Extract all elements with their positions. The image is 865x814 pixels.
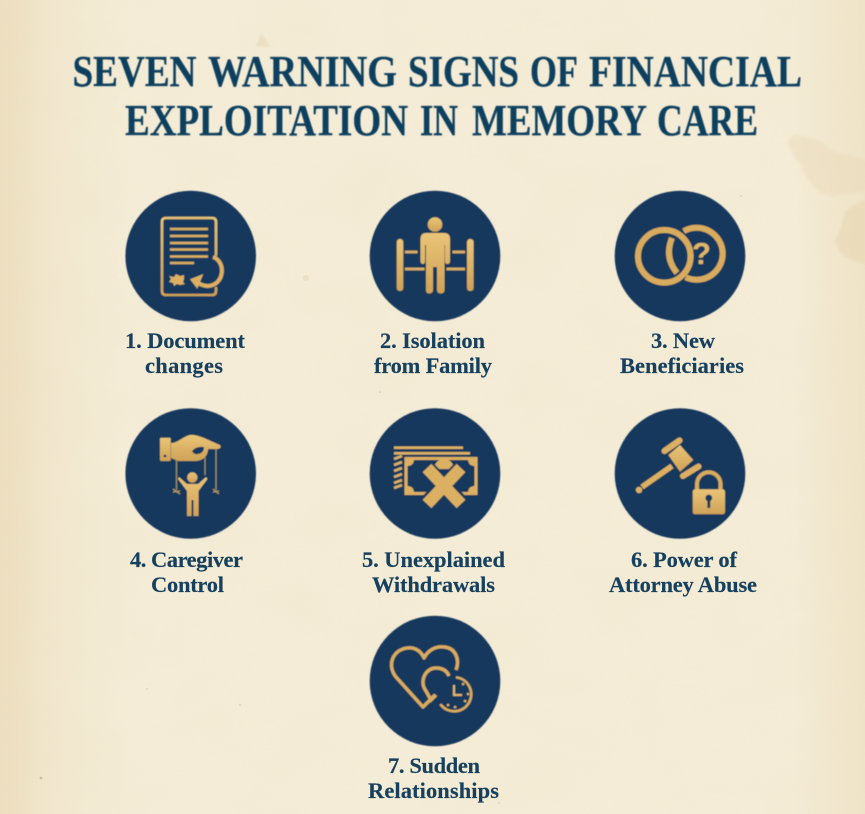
icon: stack of bills crossed out	[370, 408, 500, 539]
icon: person between barriers	[370, 191, 500, 321]
label 2	[374, 328, 493, 378]
title: SEVEN	[72, 47, 197, 96]
item 6: power of attorney abuse	[609, 408, 757, 597]
icon: hand controlling a puppet	[125, 408, 256, 539]
icon: interlocked rings with question mark	[615, 191, 745, 321]
label 2: from Family	[374, 353, 493, 378]
label 7	[368, 753, 499, 803]
label 5: Withdrawals	[372, 572, 495, 597]
label 3: 3. New	[651, 328, 716, 353]
label 6: 6. Power of	[631, 547, 738, 572]
title: WARNING	[208, 47, 397, 96]
icon: hearts and clock	[370, 616, 500, 746]
label 5	[362, 547, 505, 597]
icon: interlocked rings with question mark: ?	[692, 236, 711, 271]
label 1	[125, 328, 246, 378]
item 5: unexplained withdrawals	[362, 408, 505, 597]
label 4: Control	[151, 572, 224, 597]
item 2: isolation from family	[370, 191, 500, 378]
label 1: 1. Document	[125, 328, 246, 353]
title: EXPLOITATION	[125, 96, 408, 145]
label 2: 2. Isolation	[380, 328, 485, 353]
item 3: new beneficiaries	[615, 191, 745, 378]
icon: gavel and padlock	[615, 408, 745, 539]
item 7: sudden relationships	[368, 616, 500, 803]
label 7: Relationships	[368, 778, 499, 803]
label 6: Attorney Abuse	[609, 572, 757, 597]
title: FINANCIAL	[589, 47, 802, 96]
icon: document with arrow	[125, 191, 256, 321]
item 1: document changes	[125, 191, 256, 378]
label 4	[130, 547, 243, 597]
label 4: 4. Caregiver	[130, 547, 243, 572]
title: OF	[530, 47, 578, 96]
label 6	[609, 547, 757, 597]
title: IN	[420, 96, 458, 145]
label 3: Beneficiaries	[620, 353, 744, 378]
item 4: caregiver control	[125, 408, 256, 597]
label 5: 5. Unexplained	[362, 547, 505, 572]
label 1: changes	[145, 353, 223, 378]
label 7: 7. Sudden	[388, 753, 480, 778]
title: MEMORY	[472, 96, 647, 145]
title: CARE	[657, 96, 758, 145]
label 3	[620, 328, 744, 378]
title	[72, 47, 802, 145]
title: SIGNS	[408, 47, 519, 96]
